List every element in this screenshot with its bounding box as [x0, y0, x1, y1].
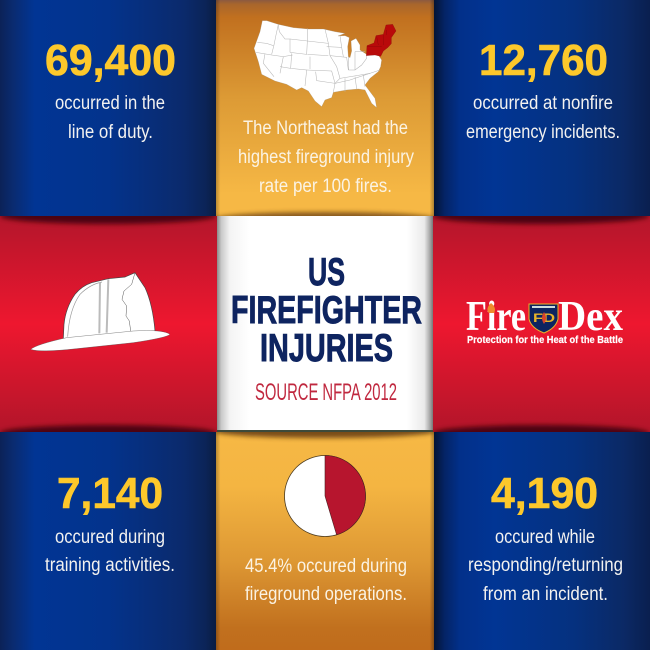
panel: nonfire emergency [434, 0, 650, 216]
source: SOURCE NFPA 2012 [255, 379, 397, 406]
stat: 7,140: 7,140 [57, 469, 163, 518]
tagline: Protection for the Heat of the Battle [467, 335, 623, 346]
text: occurred at nonfire emergency incidents: occurred at nonfire [473, 93, 613, 114]
logo: Fire Dex [466, 294, 623, 346]
icon: shield: FD [533, 311, 555, 325]
text: occured during training activities: training activities. [45, 555, 175, 576]
panel: training [0, 432, 216, 650]
text: Northeast highest rate: rate per 100 fires. [259, 176, 392, 197]
text: occurred at nonfire emergency incidents: emergency incidents. [466, 122, 620, 143]
title: INJURIES [260, 327, 393, 370]
panel: fireground operations [213, 424, 437, 650]
panel: helmet [0, 208, 217, 441]
text: occurred at nonfire emergency incidents [466, 93, 620, 143]
map region: Northeast [366, 24, 396, 56]
panel: title [217, 216, 433, 432]
panel: responding returning [434, 432, 650, 650]
title: US [308, 251, 345, 294]
text: occured while responding: from an incident. [483, 584, 608, 605]
panel: line of duty [0, 0, 216, 216]
title [231, 251, 422, 370]
pie chart [284, 456, 366, 536]
title: FIREFIGHTER [231, 289, 422, 332]
text: Northeast highest rate: The Northeast had the [243, 118, 408, 139]
text: Northeast highest rate: highest fireground injury [238, 147, 414, 168]
stat: 12,760: 12,760 [479, 36, 608, 85]
text: occured while responding: responding/returning [468, 555, 623, 576]
panel: Northeast map [213, 0, 437, 226]
stat: 69,400: 69,400 [45, 36, 176, 85]
text: occured during training activities: occured during [55, 527, 165, 548]
text: occured while responding [468, 527, 623, 605]
icon: shield [529, 304, 558, 333]
text: occurred in the line of duty [55, 93, 165, 143]
text: occurred in the line of duty: occurred in the [55, 93, 165, 114]
text: occurred in the line of duty: line of duty. [68, 122, 153, 143]
text: 45.4% fireground [245, 556, 407, 605]
stat: 4,190: 4,190 [491, 469, 598, 518]
text: occured during training activities [45, 527, 175, 576]
panel: Fire-Dex logo [433, 208, 650, 441]
text: Northeast highest rate [238, 118, 414, 197]
icon: firefighter helmet [31, 273, 170, 351]
icon: flame [487, 303, 495, 313]
logo: Fire Dex: Dex [558, 294, 623, 340]
text: 45.4% fireground: fireground operations. [245, 584, 407, 605]
text: occured while responding: occured while [495, 527, 595, 548]
icon: US map [254, 21, 396, 108]
text: 45.4% fireground: 45.4% occured during [245, 556, 407, 577]
logo: Fire Dex: Fire [466, 294, 526, 340]
